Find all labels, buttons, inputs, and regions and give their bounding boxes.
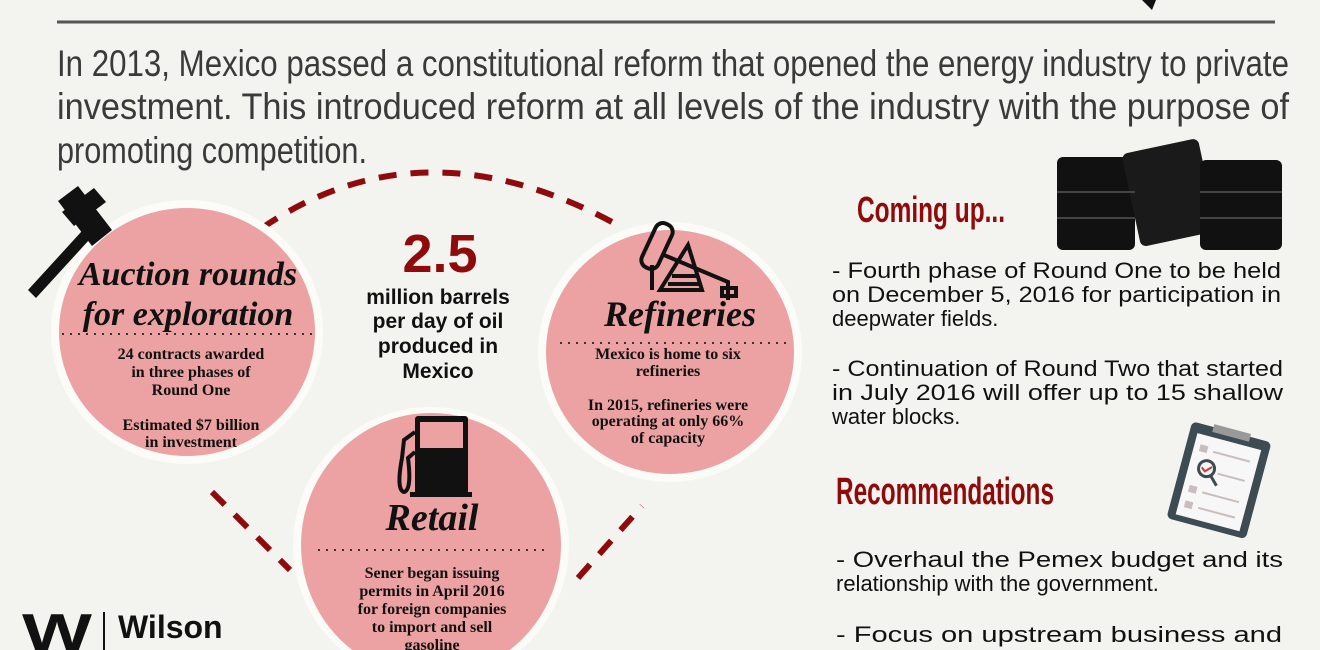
heading: coming up: Coming up...: [857, 189, 1005, 230]
stat: 2.5 million barrels: 2.5: [402, 224, 478, 284]
panel: auction rounds: 24 contracts awarded: [118, 346, 264, 363]
text: coming up items: [831, 258, 1283, 429]
panel: retail: permits in April 2016: [359, 583, 505, 600]
text: recommendations items: relationship with the government.: [836, 571, 1159, 596]
panel: refineries: Refineries: [603, 294, 756, 334]
text: coming up items: deepwater fields.: [832, 306, 998, 331]
logo: Wilson Center: [22, 604, 223, 650]
panel: auction rounds: in investment: [145, 434, 238, 451]
panel: refineries: of capacity: [631, 430, 705, 447]
icon: gavel: [28, 186, 112, 298]
stat: 2.5 million barrels: million barrels: [366, 286, 510, 309]
intro text: promoting competition.: [57, 130, 367, 171]
text: recommendations items: - Overhaul the Pemex budget and its: [836, 547, 1283, 572]
logo: Wilson Center: Wilson: [118, 609, 223, 645]
panel: auction rounds: [28, 186, 323, 464]
text: recommendations items: - Focus on upstream business and: [836, 622, 1282, 647]
text: coming up items: on December 5, 2016 for participation in: [832, 282, 1281, 307]
title fragment: [1142, 0, 1156, 10]
text: coming up items: in July 2016 will offer up to 15 shallow: [832, 380, 1283, 405]
panel: refineries: [538, 220, 802, 482]
icon: clipboard: [1166, 418, 1272, 539]
panel: retail: to import and sell: [372, 619, 493, 636]
icon: oil barrels: [1057, 138, 1282, 250]
icon: pump jack: [639, 220, 736, 300]
stat: 2.5 million barrels: [366, 224, 510, 383]
stat: 2.5 million barrels: produced in: [378, 335, 498, 358]
panel: auction rounds: in three phases of: [131, 364, 251, 381]
panel: refineries: In 2015, refineries were: [588, 397, 748, 414]
panel: refineries: operating at only 66%: [592, 413, 744, 430]
panel: auction rounds: Round One: [152, 382, 230, 399]
stat: 2.5 million barrels: per day of oil: [373, 310, 503, 333]
intro text: [57, 43, 1290, 171]
panel: retail: Retail: [385, 497, 479, 539]
panel: retail: Sener began issuing: [365, 565, 499, 582]
text: coming up items: - Fourth phase of Round One to be held: [832, 258, 1281, 283]
panel: retail: [293, 407, 569, 650]
heading: recommendations: Recommendations: [836, 471, 1054, 513]
panel: auction rounds: Estimated $7 billion: [123, 417, 260, 434]
stat: 2.5 million barrels: Mexico: [402, 360, 474, 383]
panel: refineries: Mexico is home to six: [595, 346, 741, 363]
panel: refineries: refineries: [636, 363, 700, 380]
panel: auction rounds: Auction rounds: [77, 256, 297, 293]
text: recommendations items: [836, 547, 1283, 647]
text: coming up items: - Continuation of Round Two that started: [832, 356, 1283, 381]
icon: fuel pump: [399, 416, 472, 497]
text: coming up items: water blocks.: [831, 404, 960, 429]
dashed connectors: [212, 172, 642, 578]
panel: retail: for foreign companies: [358, 601, 506, 618]
panel: auction rounds: for exploration: [83, 296, 293, 333]
